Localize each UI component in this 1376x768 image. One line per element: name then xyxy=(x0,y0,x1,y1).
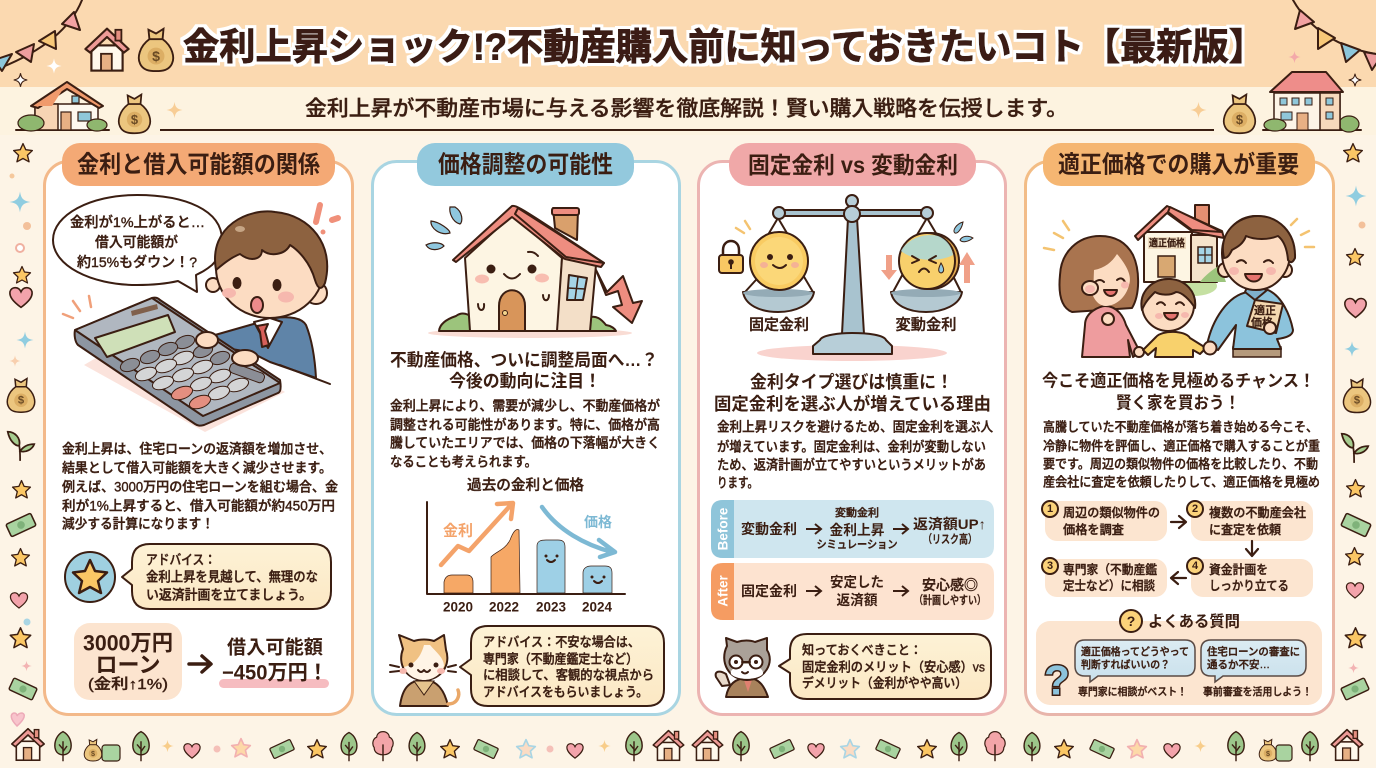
after row: 安心感◎ xyxy=(922,577,978,593)
step arrows xyxy=(1171,516,1258,584)
advice bubble: アドバイスをもらいましょう。 xyxy=(483,684,648,700)
body text: が増えています。固定金利は、金利が変動しない xyxy=(717,438,986,454)
icons: happy rays xyxy=(1044,219,1314,250)
child xyxy=(1141,279,1206,357)
step 2: 2 xyxy=(1192,503,1198,515)
question bubble 1: 判断すればいいの？ xyxy=(1081,658,1170,671)
body text: 騰していたエリアでは、価格の下落幅が大きく xyxy=(390,434,660,450)
illustration: happy family and house: 適正価格 xyxy=(1149,236,1185,250)
mother xyxy=(1060,236,1144,357)
speech bubble xyxy=(53,195,222,292)
before row: シミュレーション xyxy=(816,539,898,551)
icon: smiling coin xyxy=(750,232,808,290)
step 1: 価格を調査 xyxy=(1063,522,1124,537)
knowledge bubble: 知っておくべきこと： xyxy=(802,642,922,658)
speech bubble: 借入可能額が xyxy=(95,234,178,250)
body text: なることも考えられます。 xyxy=(390,454,537,470)
before row xyxy=(711,500,994,558)
illustration: balance scale xyxy=(719,195,975,361)
illustration: balance scale: 固定金利 xyxy=(749,316,809,334)
result callout: −450万円！ xyxy=(222,662,328,684)
before row: （リスク高） xyxy=(923,532,977,546)
body text: 金利上昇により、需要が減少し、不動産価格が xyxy=(390,398,660,414)
father: 価格 xyxy=(1251,315,1273,329)
icon: left subtitle house xyxy=(16,82,109,131)
before row: Before xyxy=(716,507,730,550)
steps flow xyxy=(1042,501,1313,597)
icon: left subtitle money bag xyxy=(119,95,150,133)
body text: ため、返済計画が立てやすいというメリットがあ xyxy=(717,456,986,472)
chart: past rates and prices: 過去の金利と価格 xyxy=(467,477,585,494)
icon: left header sparkles xyxy=(14,58,183,118)
knowledge bubble: 固定金利のメリット（安心感）vs xyxy=(802,660,985,674)
chart: past rates and prices: 金利 xyxy=(443,522,473,540)
illustration: surprised man xyxy=(206,205,338,384)
bar 2020 xyxy=(444,575,473,593)
chart: past rates and prices: 価格 xyxy=(584,514,612,530)
sub heading: 今後の動向に注目！ xyxy=(449,371,601,391)
icon: right subtitle building xyxy=(1263,72,1361,132)
advice bubble: アドバイス：不安な場合は、 xyxy=(483,634,640,650)
subtitle rule xyxy=(160,129,1214,131)
body text: 例えば、3000万円の住宅ローンを組む場合、金 xyxy=(62,478,338,494)
body text: 金利上昇リスクを避けるため、固定金利を選ぶ人 xyxy=(717,420,993,434)
after row: After xyxy=(716,575,730,607)
before row: 金利上昇 xyxy=(830,522,884,538)
step 3: 3 xyxy=(1047,560,1053,572)
loan box xyxy=(74,623,182,700)
icon: house in title xyxy=(85,29,129,71)
arrow xyxy=(189,656,211,672)
icons: sweat drops xyxy=(954,222,973,242)
illustration: sweating house xyxy=(426,206,642,338)
body text: 産会社に査定を依頼したりして、適正価格を見極め xyxy=(1043,474,1320,490)
decorative left column icons xyxy=(6,144,37,726)
result callout: 借入可能額 xyxy=(227,636,323,658)
advice bubble xyxy=(122,544,331,609)
step 3: 定士など）に相談 xyxy=(1063,578,1155,593)
step 3 xyxy=(1042,558,1167,597)
sub heading: 不動産価格、ついに調整局面へ…？ xyxy=(390,350,658,370)
icon: money bag in title xyxy=(139,29,173,71)
icon: star badge xyxy=(65,552,115,602)
answers: 事前審査を活用しよう！ xyxy=(1203,685,1312,698)
knowledge bubble xyxy=(779,634,991,699)
loan box: 3000万円 xyxy=(83,630,173,656)
loan box: ローン xyxy=(96,652,160,678)
step 4: 4 xyxy=(1192,560,1199,572)
father xyxy=(1204,216,1295,357)
advice bubble xyxy=(460,626,664,706)
step 4: 資金計画を xyxy=(1209,562,1268,577)
price arrow xyxy=(542,507,615,557)
father: 適正 xyxy=(1254,303,1276,317)
before row: 返済額UP↑ xyxy=(913,516,986,532)
answers: 専門家に相談がベスト！ xyxy=(1078,685,1187,698)
bar 2024 xyxy=(583,566,612,593)
panel heading pill xyxy=(729,143,976,186)
chart: past rates and prices xyxy=(427,477,625,614)
illustration: advisor cat xyxy=(390,635,459,706)
after row: （計画しやすい） xyxy=(914,593,986,607)
step 2: 複数の不動産会社 xyxy=(1209,505,1306,520)
bar 2022 xyxy=(491,529,520,593)
sub heading xyxy=(714,372,991,414)
icon: worried coin xyxy=(899,233,959,289)
body text: ります。 xyxy=(717,476,758,490)
body text xyxy=(62,440,338,532)
icon: right subtitle sparkle xyxy=(1190,102,1207,118)
icons: up and down arrows xyxy=(881,252,975,283)
step 2: に査定を依頼 xyxy=(1209,522,1281,537)
advice bubble: い返済計画を立てましょう。 xyxy=(146,588,312,602)
sub heading: 固定金利を選ぶ人が増えている理由 xyxy=(714,394,991,414)
decorative bottom border row xyxy=(12,729,1363,761)
illustration: cat with glasses xyxy=(716,638,770,697)
subtitle: 金利上昇が不動産市場に与える影響を徹底解説！賢い購入戦略を伝授します。 xyxy=(305,98,1068,120)
sub heading: 賢く家を買おう！ xyxy=(1116,392,1240,412)
panel heading pill: 価格調整の可能性 xyxy=(438,152,613,178)
bunting: top right xyxy=(1293,0,1376,70)
title: 金利上昇ショック!?不動産購入前に知っておきたいコト【最新版】 xyxy=(183,26,1265,68)
body text: 高騰していた不動産価格が落ち着き始める今こそ、 xyxy=(1043,420,1318,434)
step 2 xyxy=(1187,501,1313,541)
advice bubble: 専門家（不動産鑑定士など） xyxy=(483,652,638,666)
sub heading: 今こそ適正価格を見極めるチャンス！ xyxy=(1042,370,1315,390)
result callout xyxy=(219,636,329,688)
before row: 変動金利 xyxy=(835,506,879,519)
faq heading: ? xyxy=(1127,613,1135,629)
panel heading pill: 金利と借入可能額の関係 xyxy=(77,152,320,178)
step 4 xyxy=(1187,558,1313,597)
faq heading: よくある質問 xyxy=(1148,612,1240,630)
advice bubble: に相談して、客観的な視点から xyxy=(483,668,654,682)
speech bubble: 約15%もダウン！? xyxy=(77,254,197,270)
bar 2023 xyxy=(537,540,565,593)
icon: right header sparkles xyxy=(1288,51,1361,86)
question bubble 1: 適正価格ってどうやって xyxy=(1081,645,1189,658)
body text: 利が1%上昇すると、借入可能額が約450万円 xyxy=(62,498,335,514)
sub heading xyxy=(1042,370,1315,412)
bunting: top left xyxy=(0,0,82,71)
icon: padlock xyxy=(719,221,750,273)
faq heading xyxy=(1120,610,1240,632)
step 1: 周辺の類似物件の xyxy=(1063,505,1160,520)
speech bubble: 金利が1%上がると… xyxy=(70,214,205,230)
body text: 金利上昇は、住宅ローンの返済額を増加させ、 xyxy=(62,440,332,456)
step 1 xyxy=(1042,501,1167,541)
body text: 結果として借入可能額を大きく減少させます。 xyxy=(62,460,332,476)
panel heading pill: 固定金利 vs 変動金利 xyxy=(748,152,958,178)
sub heading: 金利タイプ選びは慎重に！ xyxy=(750,372,953,392)
panel heading pill xyxy=(1043,143,1315,186)
panel heading pill xyxy=(417,143,634,186)
question bubble 2: 通るか不安… xyxy=(1207,658,1270,671)
chart: past rates and prices: 2023 xyxy=(536,600,567,614)
after row xyxy=(711,563,994,620)
question bubble 2 xyxy=(1201,640,1306,682)
panel: buying at a fair price xyxy=(1026,143,1334,714)
after row: 返済額 xyxy=(836,592,878,608)
body text: 減少する計算になります！ xyxy=(62,516,214,532)
advice bubble: 金利上昇を見越して、無理のな xyxy=(146,570,318,584)
advice bubble: アドバイス： xyxy=(146,552,216,568)
panel: interest rate and borrowing capacity xyxy=(44,143,352,714)
step 3: 専門家（不動産鑑 xyxy=(1063,562,1157,577)
after row: 固定金利 xyxy=(741,583,797,599)
body text: 冷静に物件を評価し、適正価格で購入することが重 xyxy=(1043,438,1320,454)
knowledge bubble: デメリット（金利がやや高い） xyxy=(802,676,967,690)
chart: past rates and prices: 2022 xyxy=(489,600,519,614)
step 4: しっかり立てる xyxy=(1209,579,1289,593)
illustration: happy family and house xyxy=(1044,205,1314,357)
body text xyxy=(717,420,993,490)
body text xyxy=(390,398,660,470)
icon: right subtitle money bag xyxy=(1224,95,1255,133)
answers xyxy=(1078,685,1312,698)
question bubble 2: 住宅ローンの審査に xyxy=(1207,645,1300,658)
chart: past rates and prices: 2020 xyxy=(443,600,473,614)
panel heading pill: 適正価格での購入が重要 xyxy=(1058,150,1299,178)
step 1: 1 xyxy=(1047,503,1053,515)
illustration: balance scale: 変動金利 xyxy=(896,316,956,334)
illustration: calculator xyxy=(63,296,285,432)
panel: possible price adjustment xyxy=(372,143,680,714)
chart: past rates and prices: 2024 xyxy=(582,600,613,614)
loan box: (金利↑1%) xyxy=(88,676,168,693)
after row: 安定した xyxy=(830,574,884,590)
body text: 調整される可能性があります。特に、価格が高 xyxy=(390,416,660,432)
faq box xyxy=(1036,610,1322,705)
panel: fixed vs variable rate xyxy=(698,143,1006,714)
before row: 変動金利 xyxy=(741,521,797,537)
question bubble 1 xyxy=(1075,640,1195,682)
body text xyxy=(1043,420,1320,490)
sub heading xyxy=(390,350,658,391)
decorative right column icons xyxy=(1341,144,1371,700)
rate arrow xyxy=(441,503,513,565)
icon: big question mark: ? xyxy=(1044,656,1070,704)
header band xyxy=(0,0,1376,135)
panel heading pill xyxy=(62,143,335,186)
body text: 要です。周辺の類似物件の価格を比較したり、不動 xyxy=(1043,456,1318,472)
